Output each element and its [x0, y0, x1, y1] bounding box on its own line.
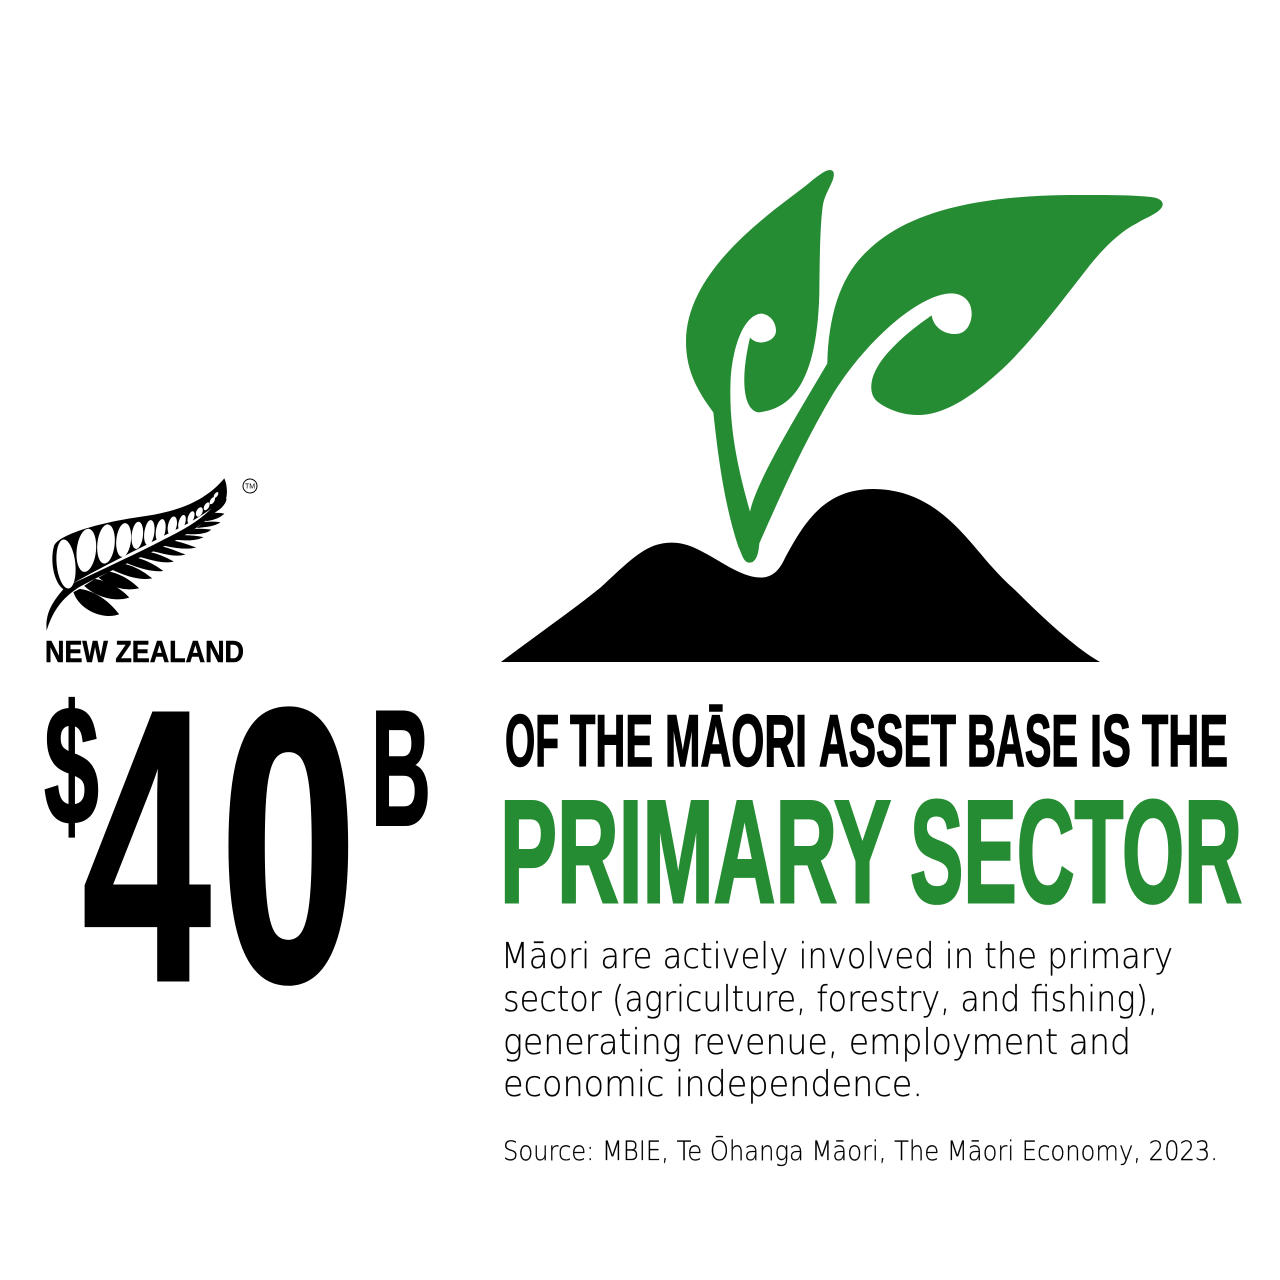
body text block: economic independence. — [503, 1064, 923, 1105]
body text block: Māori are actively involved in the primary — [501, 936, 1173, 977]
icon: green koru leaves and stem — [686, 170, 1163, 563]
digit 0: 0 — [220, 629, 357, 1063]
heading line one: THE — [570, 701, 653, 782]
suffix B: B — [371, 676, 431, 860]
logo: New Zealand fern mark — [45, 478, 257, 669]
source note: Source: MBIE, Te Ōhanga Māori, The Māori Economy, 2023. — [503, 1136, 1218, 1167]
heading line one: OF — [505, 701, 559, 782]
body text block — [501, 936, 1173, 1105]
heading line one: BASE — [967, 701, 1078, 782]
heading line one: ASSET — [819, 701, 956, 782]
dollar sign: $ — [44, 671, 99, 861]
logo wordmark: NEW ZEALAND — [45, 634, 244, 669]
heading line one: MĀORI — [665, 701, 807, 782]
body text block: sector (agriculture, forestry, and fishing), — [503, 979, 1158, 1020]
heading line one — [505, 701, 1228, 782]
heading line one: IS — [1090, 701, 1131, 782]
big figure: $40B — [44, 629, 431, 1063]
icon: trademark symbol — [243, 479, 257, 493]
icon: black hill — [501, 489, 1100, 662]
illustration: sprouting koru leaves on a hill — [501, 170, 1163, 662]
icon: trademark symbol: TM — [245, 484, 255, 490]
body text block: generating revenue, employment and — [503, 1022, 1131, 1063]
icon: silver fern — [46, 478, 227, 631]
heading line two: primary sector: PRIMARY — [500, 770, 891, 933]
digit 4: 4 — [82, 630, 212, 1063]
